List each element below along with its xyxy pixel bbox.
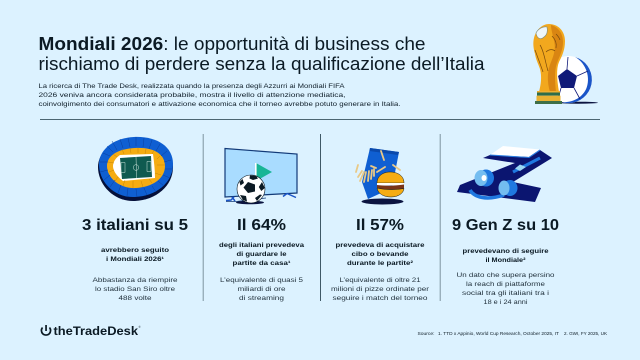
logo: The Trade Desk: ® [138, 325, 142, 329]
stat headline: 9 Gen Z su 10 [452, 217, 559, 234]
stat comparison [92, 277, 178, 302]
stat description: prevedeva di acquistare [336, 242, 425, 249]
stat description: partite da casa¹ [232, 260, 290, 267]
trophy [533, 24, 565, 104]
icon: fries box and burger [356, 148, 404, 204]
football shadow [558, 102, 598, 104]
stat description [219, 242, 304, 267]
stat comparison: miliardi di ore [238, 286, 286, 293]
title: rischiamo di perdere senza la qualificazione dell’Italia [38, 53, 485, 74]
icon: phone, headphones and Z shape [457, 146, 552, 202]
stat description: i Mondiali 2026¹ [106, 256, 164, 263]
stat comparison: lo stadio San Siro oltre [95, 286, 175, 293]
stat description: degli italiani prevedeva [219, 242, 304, 249]
stat description: il Mondiale² [486, 257, 526, 264]
stat comparison: Un dato che supera persino [456, 272, 555, 279]
panel: stadium stat [82, 137, 188, 302]
intro text [38, 83, 401, 108]
intro text: 2026 veniva ancora considerata probabile, mostra il livello di attenzione mediatica, [38, 92, 346, 99]
stat comparison: L’equivalente di oltre 21 [340, 277, 421, 284]
stat comparison [220, 277, 303, 302]
source note [418, 331, 608, 336]
intro text: La ricerca di The Trade Desk, realizzata quando la presenza degli Azzurri ai Mondiali FIFA [38, 83, 345, 90]
intro text: coinvolgimento dei consumatori e attivazione economica che il torneo avrebbe potuto generare in Italia. [38, 101, 401, 108]
stat comparison: Abbastanza da riempire [92, 277, 178, 284]
panel: food stat [331, 148, 430, 302]
header rule [40, 118, 600, 121]
stat description [101, 247, 169, 263]
stat description: prevedevano di seguire [462, 248, 549, 255]
stat comparison: milioni di pizze ordinate per [331, 286, 430, 293]
stat headline: Il 57% [356, 217, 404, 234]
stat comparison: L’equivalente di quasi 5 [220, 277, 303, 284]
icon: trophy and football [533, 24, 598, 104]
stat comparison [456, 272, 555, 306]
stat comparison: seguire i match del torneo [332, 295, 428, 302]
stat comparison [331, 277, 430, 302]
source note: 1. TTD x Appinio, World Cup Research, October 2025, IT [438, 331, 559, 336]
stat description [336, 242, 425, 267]
stat comparison: di streaming [239, 295, 284, 302]
title: Mondiali 2026: le opportunità di business che [38, 33, 426, 54]
stat comparison: 18 e i 24 anni [484, 299, 528, 306]
stat description: durante le partite² [347, 260, 414, 267]
football [545, 56, 592, 103]
panel: Gen Z stat [452, 146, 559, 306]
icon: TV with football [225, 148, 297, 204]
stat description: di guardare le [236, 251, 287, 258]
icon: stadium [98, 137, 173, 201]
stat description: cibo o bevande [352, 251, 409, 258]
stat headline: Il 64% [237, 217, 286, 234]
stat comparison: la reach di piattaforme [466, 281, 545, 288]
column divider [440, 134, 441, 301]
title [38, 33, 485, 74]
stat description: avrebbero seguito [101, 247, 169, 254]
stat headline: 3 italiani su 5 [82, 217, 188, 234]
column divider [203, 134, 204, 301]
source note: Source: [418, 331, 434, 336]
logo: The Trade Desk: theTradeDesk [54, 324, 138, 338]
stat description [462, 248, 549, 264]
stat comparison: 488 volte [118, 295, 152, 302]
column divider [320, 134, 321, 301]
source note: 2. GWI, FY 2025, UK [564, 331, 608, 336]
stat comparison: social tra gli italiani tra i [462, 290, 550, 297]
panel: TV stat [219, 148, 304, 302]
